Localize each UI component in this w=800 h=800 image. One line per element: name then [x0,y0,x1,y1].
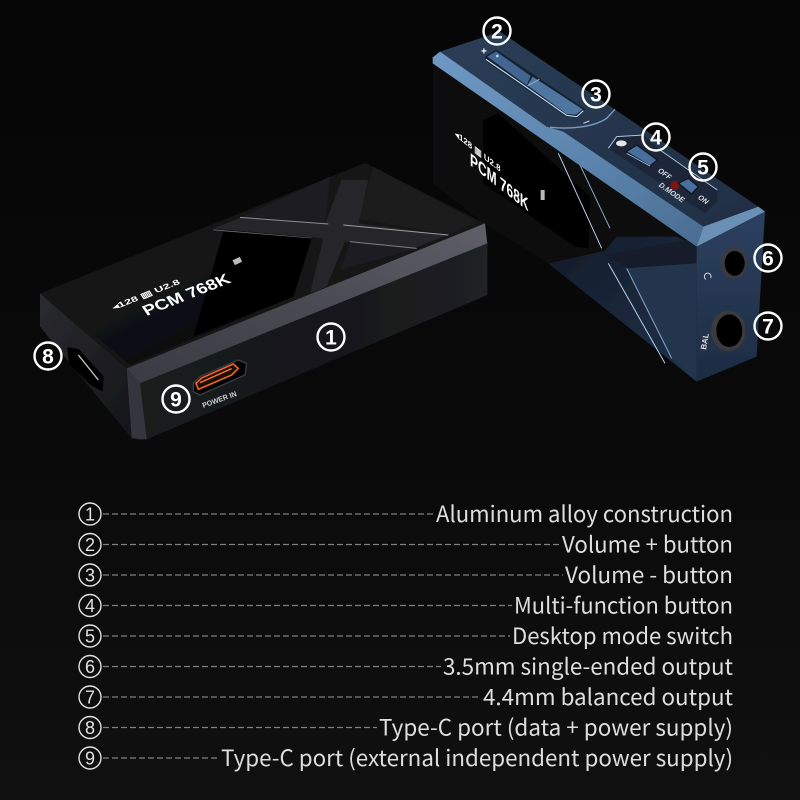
callout 5: 5 [697,156,709,180]
legend row 9: Type-C port (external independent power supply) [221,741,733,773]
legend row 8: 8 [85,718,95,738]
X pattern panel [213,167,477,293]
callout 3: 3 [590,84,602,106]
glossy screen [45,230,312,365]
callout 1 [318,324,344,350]
corner facet [127,368,147,439]
corner facet [697,207,765,247]
4.4mm jack [699,310,746,351]
callout 9 [162,386,190,412]
display text: PCM 768K [470,149,529,216]
callout 4 [642,124,670,150]
legend row 2: 2 [85,535,95,555]
legend row 2 [79,528,733,560]
glass screen face [433,60,697,382]
callout 5 [690,154,716,180]
legend row 6 [79,650,734,682]
top glass face [40,163,485,368]
callout 6: 6 [762,248,774,270]
port end face [697,212,765,382]
control recess [608,135,717,213]
left end face [40,293,132,438]
callout 9: 9 [170,388,182,412]
legend row 7: 4.4mm balanced output [483,680,734,712]
desktop mode switch: OFF [656,166,674,182]
callout 2 [484,18,510,44]
device: left black unit [40,163,487,440]
callout 8: 8 [42,346,54,368]
legend row 1: 1 [85,504,95,524]
grey bevel strip [127,223,487,383]
display text [454,127,545,216]
legend row 9: 9 [85,748,95,768]
desktop mode switch [656,166,711,207]
legend row 8 [79,710,733,742]
legend row 3: Volume - button [565,558,733,590]
Type-C power port: POWER IN [201,389,238,410]
lower blue body panel [548,153,697,382]
volume buttons [481,46,589,123]
legend row 6: 3.5mm single-ended output [443,650,734,682]
Type-C power port [193,360,247,410]
Type-C port left [68,348,103,390]
display text: ◂128 ▥ U2.8 [454,127,501,174]
legend row 3 [79,558,733,590]
legend row 4 [79,588,733,620]
callout 1: 1 [325,326,337,350]
legend row 7 [79,680,734,712]
top control face [440,32,758,227]
display text: ◂128 ▥ U2.8 [109,278,182,312]
display text [109,257,242,319]
legend row 1: Aluminum alloy construction [436,497,733,529]
legend row 5 [79,619,733,651]
front side face [137,243,487,440]
OLED display [483,113,590,248]
legend row 3: 3 [85,566,95,586]
3.5mm jack [704,248,747,279]
legend row 1 [79,497,733,529]
callout 4: 4 [650,126,662,150]
blue bevel strip [433,52,703,247]
legend row 8: Type-C port (data + power supply) [379,710,733,742]
callout markers [34,18,782,412]
multi-function button [616,140,657,166]
callout 6 [754,244,782,272]
legend row 5: Desktop mode switch [512,619,733,651]
callout 2: 2 [491,20,503,44]
legend row 6: 6 [85,657,95,677]
OLED display [193,232,312,337]
callout 7: 7 [762,316,774,338]
display text: PCM 768K [139,271,234,319]
callout 7 [754,312,782,340]
legend row 4: 4 [85,596,95,616]
legend row 2: Volume + button [562,528,733,560]
legend row 7: 7 [85,688,95,708]
callout 8 [34,342,62,370]
legend row 4: Multi-function button [514,588,733,620]
legend row 5: 5 [85,626,95,646]
desktop mode switch: ON [696,193,711,207]
device: right blue unit [433,32,765,382]
curved groove [550,109,615,128]
callout 3 [582,80,610,108]
desktop mode switch: D.MODE [657,180,687,205]
volume buttons: + [481,46,487,57]
4.4mm jack: BAL [699,333,711,350]
legend list [79,497,734,773]
